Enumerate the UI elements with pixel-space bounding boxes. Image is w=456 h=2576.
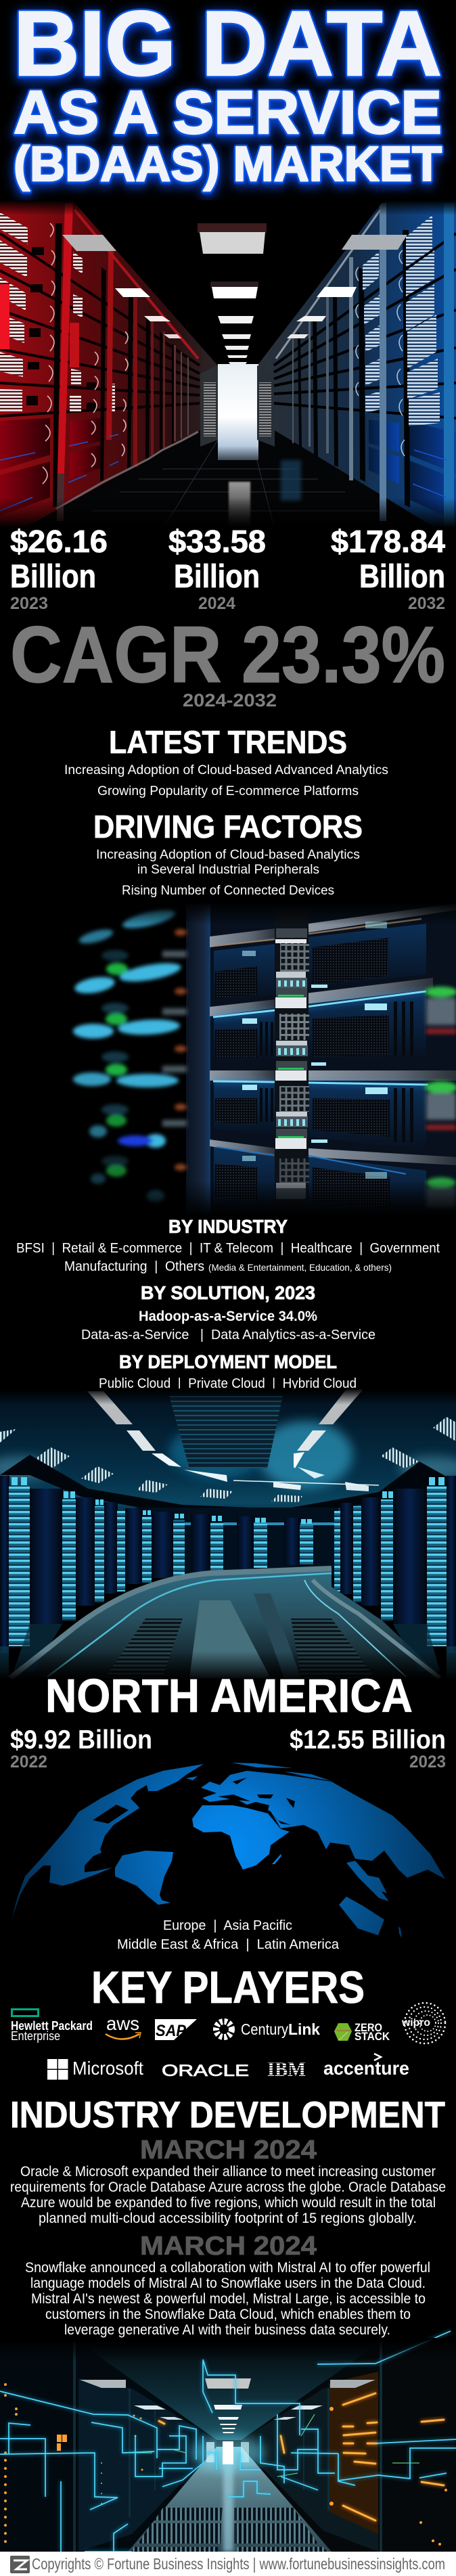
right wall — [257, 200, 456, 526]
logo: sap — [155, 2019, 197, 2040]
cyan circuit lines — [0, 2331, 456, 2552]
floor — [27, 430, 433, 526]
black ceiling bands — [0, 1455, 456, 1516]
logo: aws: aws — [106, 2013, 139, 2034]
value 2023: $12.55 Billion — [290, 1725, 446, 1755]
logo: ibm: IBM — [267, 2057, 306, 2081]
by industry: BFSI | Retail & E-commerce | IT & Telecom | Healthcare | Government — [16, 1241, 440, 1256]
logo: centurylink: Link — [288, 2020, 320, 2038]
vent lights — [0, 1417, 456, 1504]
image: server corridor, red and blue — [0, 200, 456, 528]
image: server rack closeup — [0, 902, 456, 1216]
ceiling lights center — [198, 223, 267, 364]
title: (BDAAS) MARKET — [14, 137, 442, 191]
logo: accenture: accenture — [323, 2058, 409, 2079]
image: blue data hall — [0, 1388, 456, 1681]
driving factors: Increasing Adoption of Cloud-based Analytics — [96, 848, 360, 862]
development: march 2024 snowflake and mistral: MARCH 2024 — [140, 2232, 317, 2261]
ceiling lights side — [62, 235, 407, 338]
value 2023: 2023 — [409, 1753, 446, 1771]
africa — [192, 1805, 290, 1870]
inner racks — [78, 2378, 216, 2552]
by solution: Data-as-a-Service | Data Analytics-as-a-Service — [81, 1328, 375, 1342]
logo: oracle: ORACLE — [162, 2062, 249, 2080]
ceiling lamps side — [80, 2380, 375, 2420]
title: (BDAAS) MARKET — [14, 137, 442, 191]
by solution: Hadoop-as-a-Service 34.0% — [139, 1309, 317, 1324]
by solution: BY SOLUTION, 2023 — [141, 1282, 315, 1303]
icon: fortune business insights logo — [10, 2556, 30, 2573]
stat 2023: $26.16 — [10, 524, 108, 559]
top rails — [74, 210, 198, 359]
rack bodies — [0, 1476, 456, 1653]
south america — [115, 1851, 173, 1905]
by industry: Manufacturing | Others — [64, 1259, 204, 1274]
rack light columns — [9, 1486, 447, 1646]
stat 2023: Billion — [10, 559, 96, 595]
logo: zerostack: STACK — [355, 2030, 390, 2043]
red blocks — [0, 284, 79, 367]
blue streaks — [0, 434, 447, 511]
amber streaks — [159, 2393, 444, 2521]
left wall — [0, 200, 218, 526]
row gaps right — [274, 233, 456, 418]
rack body — [210, 903, 456, 1215]
striped vents right — [363, 215, 440, 426]
value 2023 — [290, 1725, 446, 1771]
stat 2024: $33.58 — [168, 524, 266, 559]
development: march 2024 snowflake and mistral — [25, 2232, 430, 2338]
title: AS A SERVICE — [14, 79, 442, 147]
server handles left — [43, 223, 128, 484]
title: AS A SERVICE — [14, 79, 442, 147]
other regions: Europe | Asia Pacific — [163, 1918, 292, 1933]
floor fade — [0, 1651, 456, 1681]
ceiling — [78, 2342, 381, 2440]
logo: hewlett packard enterprise: Enterprise — [11, 2029, 60, 2043]
left wall — [0, 2342, 216, 2552]
logo: wipro: wipro — [401, 2017, 430, 2029]
stat 2032 — [331, 524, 445, 613]
ceiling lamps center — [205, 2378, 251, 2433]
driving factors: in Several Industrial Peripherals — [137, 863, 319, 877]
rack base rails left — [56, 432, 198, 509]
vertical rails right — [292, 203, 454, 528]
madagascar — [272, 1854, 281, 1864]
server handles right — [356, 250, 405, 456]
by industry: (Media & Entertainment, Education, & others) — [208, 1262, 392, 1273]
development: march 2024 snowflake and mistral: Snowflake announced a collaboration with Mistral AI to offer powerful — [25, 2260, 430, 2276]
arctic and iceland — [231, 1763, 292, 1768]
blurred lights right — [425, 987, 456, 1208]
top fade — [0, 2338, 456, 2362]
tan edge lights — [214, 919, 421, 946]
vertical rails left — [57, 203, 189, 521]
latest trends — [64, 724, 388, 798]
north america heading: NORTH AMERICA — [45, 1669, 413, 1722]
faint blue edge lights — [216, 1147, 406, 1174]
other regions — [117, 1918, 340, 1952]
logo: centurylink — [216, 2020, 320, 2038]
stat 2024: 2024 — [198, 594, 235, 613]
black slots — [26, 247, 96, 409]
black ceiling — [72, 200, 384, 364]
logo: wipro — [401, 2003, 445, 2043]
floor — [128, 2447, 332, 2552]
north america values — [10, 1725, 446, 1771]
logo: centurylink: Century — [241, 2020, 288, 2038]
amber lights — [4, 2383, 447, 2546]
green circuit lines — [123, 2414, 419, 2477]
ceiling light strips — [87, 1389, 369, 1491]
driving factors — [93, 809, 363, 898]
development: march 2024 snowflake and mistral: Mistral AI's newest & powerful model, Mistral Large, is accessible to — [31, 2291, 426, 2307]
floor — [7, 1568, 443, 1678]
driving factors: DRIVING FACTORS — [93, 809, 363, 844]
latest trends: Increasing Adoption of Cloud-based Advanced Analytics — [64, 763, 388, 777]
pillar — [186, 903, 210, 1215]
striped vents left — [0, 212, 115, 411]
edge fades — [0, 902, 456, 925]
latest trends: Growing Popularity of E-commerce Platforms — [97, 784, 359, 798]
cyan edge lights — [213, 991, 428, 1085]
development: march 2024 snowflake and mistral: leverage generative AI with their business data securely. — [64, 2322, 390, 2338]
globe — [12, 1763, 445, 1938]
doorway — [218, 364, 258, 460]
lower red panels — [0, 418, 100, 516]
center glow strip — [223, 2453, 233, 2552]
latest trends: LATEST TRENDS — [109, 724, 347, 760]
cyan indicators — [242, 922, 388, 1179]
floor curbs — [10, 1568, 440, 1678]
value 2022: 2022 — [10, 1753, 47, 1771]
by deployment model: BY DEPLOYMENT MODEL — [119, 1351, 337, 1372]
continents — [12, 1763, 445, 1938]
logo: microsoft — [47, 2058, 143, 2080]
stat 2024: Billion — [174, 559, 260, 595]
value 2022: $9.92 Billion — [10, 1725, 152, 1755]
new zealand — [398, 1926, 402, 1938]
rack gaps left — [53, 223, 174, 507]
bottom fade — [0, 497, 456, 528]
pillars — [73, 2342, 382, 2552]
stat 2024 — [168, 524, 266, 613]
back wall — [135, 1508, 338, 1575]
floor grates — [105, 1619, 375, 1678]
by deployment model: Public Cloud | Private Cloud | Hybrid Cloud — [99, 1376, 357, 1391]
logo: zerostack: ZERO — [355, 2021, 382, 2034]
inland seas — [93, 1778, 295, 1825]
amber panel — [329, 2372, 378, 2534]
panel backgrounds — [214, 924, 426, 1211]
key player logos — [11, 2003, 445, 2081]
australia — [339, 1897, 384, 1935]
lower blue panels — [369, 420, 456, 521]
stat 2023 — [10, 524, 108, 613]
key players heading: KEY PLAYERS — [91, 1962, 365, 2013]
value 2022 — [10, 1725, 152, 1771]
driving factors: Rising Number of Connected Devices — [122, 884, 334, 898]
development: march 2024 snowflake and mistral: customers in the Snowflake Data Cloud, which enables them to — [45, 2307, 411, 2322]
by industry: BY INDUSTRY — [168, 1216, 288, 1237]
stat 2032: 2032 — [408, 594, 445, 613]
ceiling — [0, 1391, 456, 1523]
north america and greenland — [12, 1764, 204, 1920]
rack top lamps — [12, 1477, 444, 1524]
other regions: Middle East & Africa | Latin America — [117, 1937, 340, 1952]
small vertical indicators — [260, 1001, 413, 1142]
footer — [0, 2552, 456, 2576]
silver bezels — [210, 903, 456, 1165]
development: march 2024 oracle and microsoft — [10, 2136, 446, 2226]
logo: microsoft: Microsoft — [72, 2058, 143, 2079]
market size stats — [10, 524, 445, 613]
blurred lights left — [73, 906, 187, 1202]
stat 2032: Billion — [359, 559, 445, 595]
by solution — [81, 1282, 375, 1342]
CAGR: 2024-2032 — [183, 690, 277, 710]
right wall — [242, 2342, 456, 2552]
logo: hewlett packard enterprise: Hewlett Packard — [11, 2019, 93, 2033]
end of corridor glow — [191, 2435, 265, 2470]
by industry — [16, 1216, 440, 1274]
title — [14, 0, 442, 191]
development: march 2024 snowflake and mistral: language models of Mistral AI to Snowflake users in the Data Cloud. — [30, 2276, 426, 2291]
stat 2023: 2023 — [10, 594, 48, 613]
image: neon circuit corridor — [0, 2331, 456, 2552]
development: march 2024 oracle and microsoft: planned multi-cloud accessibility footprint of 15 regions globally. — [39, 2211, 417, 2226]
row gaps left — [0, 233, 200, 416]
indonesia — [346, 1861, 389, 1901]
development: march 2024 oracle and microsoft: MARCH 2024 — [140, 2136, 317, 2165]
mesh panels — [215, 938, 390, 1208]
logo: zerostack — [334, 2021, 390, 2043]
rack gaps right — [298, 230, 410, 507]
drive bay column — [275, 907, 309, 1215]
stat 2032: $178.84 — [331, 524, 445, 559]
logo: sap: SAP — [156, 2022, 187, 2040]
logo: hewlett packard enterprise — [11, 2010, 93, 2043]
floor grates — [130, 2508, 327, 2552]
by deployment model — [99, 1351, 357, 1391]
eurasia — [201, 1771, 445, 1879]
